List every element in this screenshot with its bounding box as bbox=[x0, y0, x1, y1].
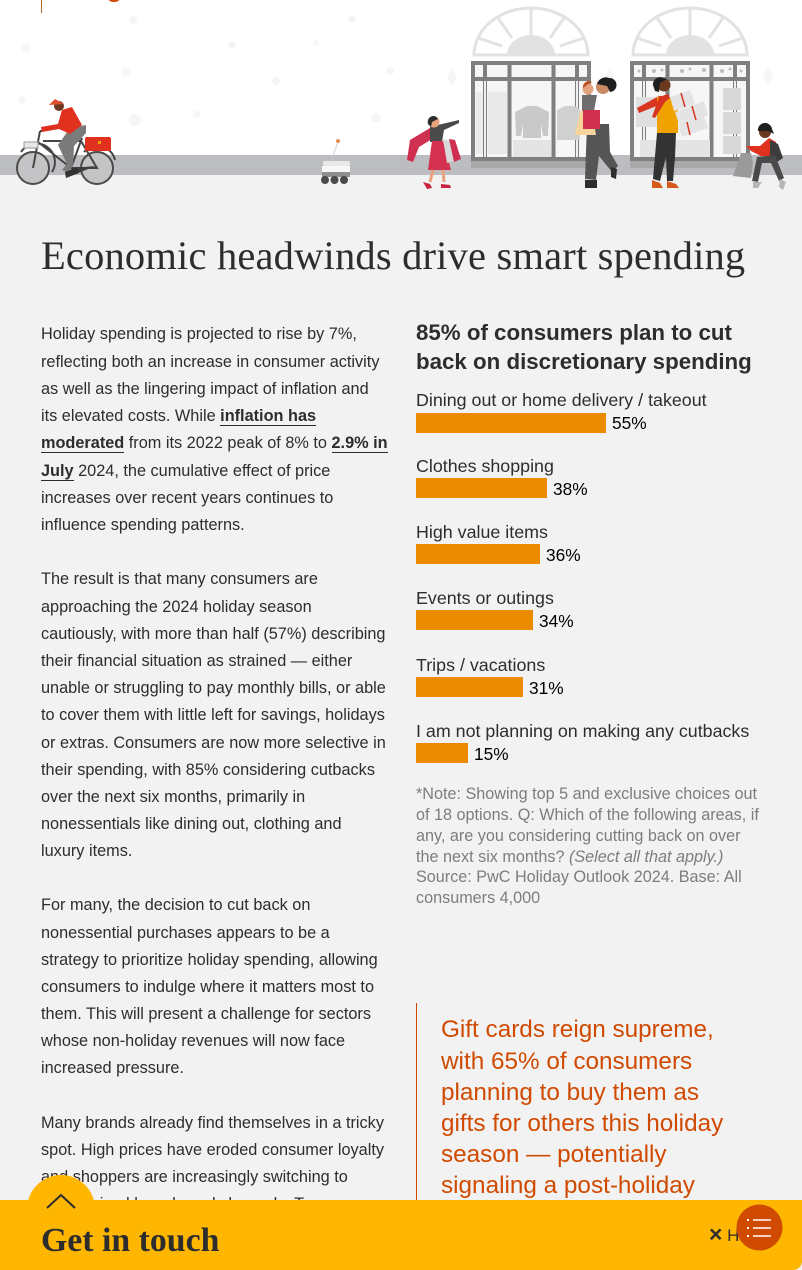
body text column: nonessential purchases appears to be a bbox=[41, 924, 330, 942]
chart heading bbox=[416, 320, 752, 374]
body text column: and shoppers are increasingly switching to bbox=[41, 1168, 348, 1186]
hero illustration bbox=[0, 0, 802, 190]
chart heading: back on discretionary spending bbox=[416, 349, 752, 374]
bar chart: Trips / vacations bbox=[416, 655, 545, 675]
body text column: their financial situation as strained — either bbox=[41, 652, 352, 670]
callout: gift cards: gifts for others this holiday bbox=[441, 1110, 723, 1136]
chart note and source: Source: PwC Holiday Outlook 2024. Base: All bbox=[416, 868, 742, 886]
chart heading: 85% of consumers plan to cut bbox=[416, 320, 732, 345]
delivery robot bbox=[321, 139, 350, 184]
body text column: over the next six months, primarily in bbox=[41, 788, 305, 806]
body text column: influence spending patterns. bbox=[41, 516, 245, 534]
body text column: or extras. Consumers are now more selective in bbox=[41, 734, 386, 752]
chart note and source: consumers 4,000 bbox=[416, 889, 540, 907]
road bbox=[0, 155, 802, 175]
callout: gift cards: signaling a post-holiday bbox=[441, 1172, 695, 1198]
woman pointing with scarf and bags bbox=[407, 116, 461, 189]
chart note and source: the next six months? (Select all that apply.) bbox=[416, 848, 723, 866]
cyclist bbox=[17, 99, 115, 184]
cropped heading rule and glyph bbox=[41, 0, 119, 13]
scroll-up button bbox=[28, 1175, 94, 1209]
body text column: unable or struggling to pay monthly bills, or able bbox=[41, 679, 386, 697]
bar chart: High value items bbox=[416, 522, 548, 542]
body text column: reflecting both an increase in consumer activity bbox=[41, 353, 379, 371]
callout: gift cards bbox=[416, 1003, 767, 1200]
footer bar bbox=[0, 1200, 802, 1270]
body text column: increases over recent years continues to bbox=[41, 489, 333, 507]
child crouching with bags bbox=[733, 123, 786, 190]
body text column: strategy to prioritize holiday spending, allowing bbox=[41, 951, 378, 969]
bar chart: 38% bbox=[553, 479, 588, 499]
bar chart: Clothes shopping bbox=[416, 456, 554, 476]
body text column: luxury items. bbox=[41, 842, 132, 860]
body text column: its elevated costs. While inflation has bbox=[41, 407, 316, 425]
body text column: Holiday spending is projected to rise by 7%, bbox=[41, 325, 357, 343]
callout: gift cards: with 65% of consumers bbox=[441, 1048, 692, 1074]
bar chart: I am not planning on making any cutbacks bbox=[416, 721, 749, 741]
body text column: whose non-holiday revenues will now face bbox=[41, 1032, 345, 1050]
body text column: lower-priced brands and channels. To bbox=[41, 1195, 311, 1213]
chart note and source bbox=[416, 785, 759, 907]
man carrying gift boxes bbox=[637, 77, 708, 188]
callout: gift cards: Gift cards reign supreme, bbox=[441, 1016, 714, 1042]
body text column: moderated from its 2022 peak of 8% to 2.9% in bbox=[41, 434, 388, 452]
bar chart: 36% bbox=[546, 545, 581, 565]
bar chart: 15% bbox=[474, 744, 509, 764]
body text column: approaching the 2024 holiday season bbox=[41, 598, 312, 616]
bar chart: 55% bbox=[612, 413, 647, 433]
body text column: to cover them with little left for savings, holidays bbox=[41, 706, 385, 724]
body text column: nonessentials like dining out, clothing and bbox=[41, 815, 342, 833]
body text column: spot. High prices have eroded consumer loyalty bbox=[41, 1141, 384, 1159]
bar chart: Dining out or home delivery / takeout bbox=[416, 390, 707, 410]
title: Economic headwinds drive smart spending bbox=[41, 233, 745, 278]
body text column: July 2024, the cumulative effect of price bbox=[41, 462, 330, 480]
body text column: increased pressure. bbox=[41, 1059, 184, 1077]
body text column: them. This will present a challenge for sectors bbox=[41, 1005, 371, 1023]
body text column bbox=[41, 325, 388, 1213]
body text column: as well as the lingering impact of inflation and bbox=[41, 380, 369, 398]
callout: gift cards: planning to buy them as bbox=[441, 1078, 699, 1106]
chart note and source: any, are you considering cutting back on over bbox=[416, 827, 741, 845]
body text column: cautiously, with more than half (57%) describing bbox=[41, 625, 385, 643]
callout: gift cards: season — potentially bbox=[441, 1140, 667, 1168]
bar chart: Events or outings bbox=[416, 588, 554, 608]
body text column: consumers to indulge where it matters most to bbox=[41, 978, 374, 996]
body text column: their spending, with 85% considering cutbacks bbox=[41, 761, 375, 779]
storefront right bbox=[630, 8, 750, 168]
bar chart: 34% bbox=[539, 611, 574, 631]
bar chart bbox=[416, 390, 749, 764]
footer heading: Get in touch bbox=[41, 1222, 219, 1259]
chart note and source: of 18 options. Q: Which of the following areas, if bbox=[416, 806, 759, 824]
bar chart: 31% bbox=[529, 678, 564, 698]
body text column: Many brands already find themselves in a tricky bbox=[41, 1114, 384, 1132]
chart note and source: *Note: Showing top 5 and exclusive choices out bbox=[416, 785, 757, 803]
man carrying child with shopping bags bbox=[575, 77, 618, 188]
hide control: × Hide bbox=[709, 1221, 762, 1247]
body text column: For many, the decision to cut back on bbox=[41, 896, 310, 914]
body text column: The result is that many consumers are bbox=[41, 570, 318, 588]
storefront left bbox=[471, 8, 591, 168]
menu button bbox=[736, 1204, 782, 1250]
